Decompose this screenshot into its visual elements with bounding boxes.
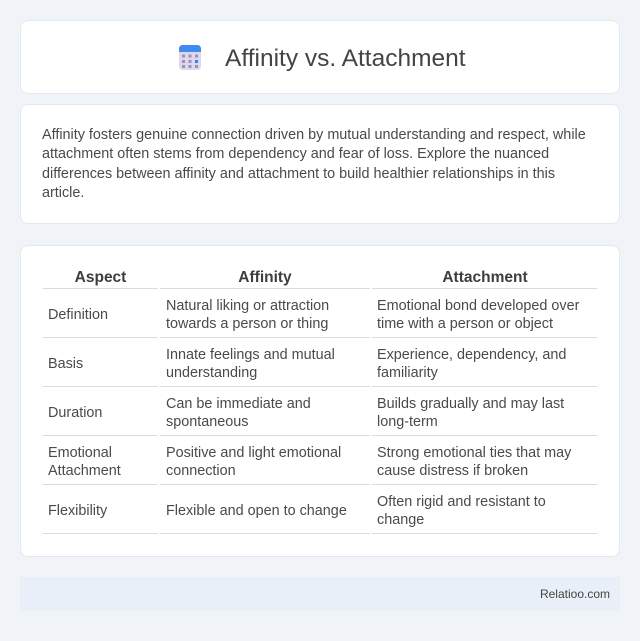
row: Emotional Attachment: Strong emotional ties that may (377, 445, 571, 461)
row: Duration: Duration (48, 405, 102, 421)
text block: intro paragraph: Affinity fosters genuine connection driven by mutual understanding and respect, while (42, 127, 586, 143)
panel: intro text (20, 104, 620, 224)
row: Definition: Natural liking or attraction (166, 298, 329, 314)
row: Definition: towards a person or thing (166, 316, 328, 332)
text block: intro paragraph: article. (42, 185, 84, 201)
row: Emotional Attachment: Attachment (48, 463, 121, 479)
table header (75, 269, 528, 286)
row: Flexibility: Flexibility (48, 503, 107, 519)
table header: Aspect (75, 269, 126, 286)
table header: Attachment (442, 269, 528, 286)
title: Affinity vs. Attachment (225, 45, 466, 72)
row: Definition: Emotional bond developed over (377, 298, 579, 314)
row: Basis: familiarity (377, 365, 438, 381)
row: Flexibility (48, 494, 546, 528)
row: Duration: Can be immediate and (166, 396, 311, 412)
row: Flexibility: change (377, 512, 424, 528)
panel: header card (20, 20, 620, 94)
row: Definition: Definition (48, 307, 108, 323)
row: Duration: Builds gradually and may last (377, 396, 564, 412)
row: Basis (48, 347, 566, 381)
text block: intro paragraph: attachment often stems from dependency and fear of loss. Explore the nuanced (42, 146, 549, 162)
row: Emotional Attachment: Positive and light emotional (166, 445, 341, 461)
row: Duration: long-term (377, 414, 438, 430)
row: Flexibility: Often rigid and resistant to (377, 494, 546, 510)
footer text: Relatioo.com (540, 587, 610, 601)
row: Basis: understanding (166, 365, 257, 381)
panel: footer (20, 577, 620, 611)
text block: intro paragraph (42, 127, 586, 201)
row: Emotional Attachment: Emotional (48, 445, 112, 461)
row: Emotional Attachment (48, 445, 572, 479)
table header: Affinity (238, 269, 292, 286)
row: Basis: Innate feelings and mutual (166, 347, 335, 363)
row: Basis: Basis (48, 356, 83, 372)
panel: comparison table (20, 245, 620, 557)
text block: intro paragraph: differences between affinity and attachment to build healthier relationships in this (42, 166, 555, 182)
row: Duration: spontaneous (166, 414, 248, 430)
row: Flexibility: Flexible and open to change (166, 503, 347, 519)
row: Duration (48, 396, 564, 430)
row: Definition: time with a person or object (377, 316, 553, 332)
row: Definition (48, 298, 580, 332)
row: Emotional Attachment: connection (166, 463, 236, 479)
row: Emotional Attachment: cause distress if broken (377, 463, 528, 479)
row: Basis: Experience, dependency, and (377, 347, 566, 363)
icon: calendar (179, 45, 201, 70)
